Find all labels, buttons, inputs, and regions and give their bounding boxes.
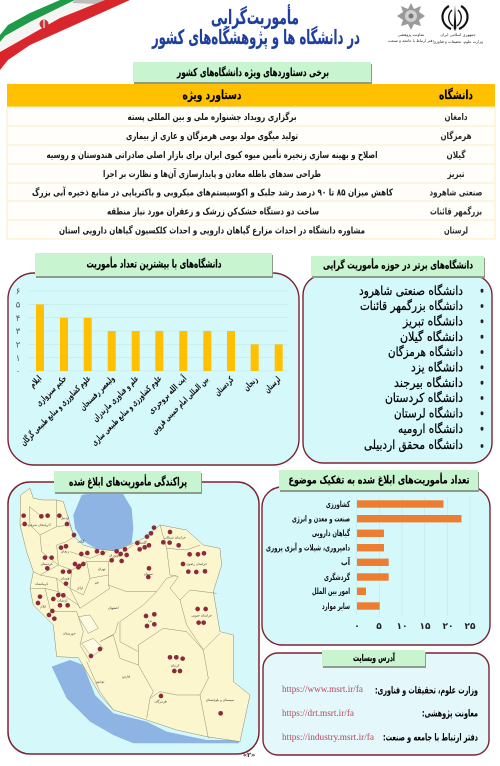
list of top universities: دانشگاه کردستان [385,390,463,406]
list of top universities: دانشگاه ارومیه [398,421,463,437]
list of top universities: دانشگاه بزرگمهر قائنات [360,298,463,314]
column chart: ایلام [28,374,44,390]
bar chart: کشاورزی [326,500,350,510]
list of top universities [359,283,482,453]
column chart: ولیعصر رفسنجان [78,374,117,413]
map of Iran: همدان [61,576,70,580]
icon: research deputy star logo: معاونت پژوهشی [398,32,424,37]
bar chart: ۰ [354,622,360,632]
bar chart: آب [341,556,351,568]
bar chart [266,497,476,632]
table rows: طراحی سدهای باطله معادن و پایدارسازی آن‌ها و نظارت بر اجرا [103,167,321,180]
map of Iran: تهران [98,567,106,571]
column chart: علم و فناوری مازندران [91,374,141,424]
list of top universities: دانشگاه گیلان [400,329,463,344]
map of Iran: یزد [148,619,152,623]
table rows: تولید میگوی مولد بومی هرمزگان و عاری از بیماری [126,130,298,142]
icon: Iran flag ribbon [0,0,130,70]
bar chart: ۵ [376,622,382,632]
list of top universities: دانشگاه یزد [411,360,463,376]
column chart: لرستان [263,375,283,396]
table rows: هرمزگان [440,130,472,142]
map of Iran: فارس [122,675,131,679]
column chart: ۵ [16,300,21,310]
column chart: علوم کشاورزی و منابع طبیعی ساری [90,374,164,448]
bar chart: ۱۰ [396,622,408,632]
map of Iran: ایلام [40,605,46,610]
heading: map: پراکندگی مأموریت‌های ابلاغ شده [69,474,187,490]
list of top universities: دانشگاه تبریز [402,314,463,330]
bar chart: سایر موارد [322,602,350,612]
address rows: https://industry.msrt.ir/fa [282,732,374,742]
map of Iran: گیلان [77,539,85,543]
list of top universities: دانشگاه لرستان [394,406,463,422]
panel: top universities list [303,256,492,463]
icon: research deputy star logo [388,3,434,43]
page number: «۲» [243,751,255,759]
map of Iran: اردبیل [61,516,69,520]
panel: universities with most missions [8,253,299,465]
column chart: علوم کشاورزی و منابع طبیعی گرگان [18,373,93,448]
map of Iran: لرستان [57,599,67,603]
bar chart: ۲۰ [442,622,454,632]
table rows: گیلان [446,149,466,161]
bar chart: ۲۵ [464,622,476,632]
map of Iran [20,488,250,743]
table rows: برگزاری رویداد جشنواره ملی و بین المللی پسته [128,111,296,123]
icon: Islamic Republic emblem: جمهوری اسلامی ایران [440,32,476,37]
list of top universities: دانشگاه صنعتی شاهرود [359,283,463,299]
list of top universities: دانشگاه محقق اردبیلی [364,437,463,453]
table rows: اصلاح و بهینه سازی زنجیره تأمین میوه کیوی ایران برای بازار اصلی صادراتی هندوستان و روسیه [46,148,378,161]
table rows: مشاوره دانشگاه در احداث مزارع گیاهان دارویی و احداث کلکسیون گیاهان دارویی استان [59,224,365,236]
list of top universities: دانشگاه بیرجند [394,375,463,391]
map of Iran: اصفهان [108,606,119,610]
panel: missions by topic [262,470,490,645]
column chart: ۰ [16,367,20,377]
column chart: بین المللی امام خمینی قزوین [150,375,211,437]
map of Iran: اراک [77,586,83,590]
map of Iran: قم [95,580,99,584]
map of Iran: سمنان [144,572,153,576]
heading: achievements: برخی دستاوردهای ویژه دانشگاه‌های کشور [176,66,329,79]
bar chart: دامپروری، شیلات و آبزی پروری [266,542,350,554]
heading: most missions: دانشگاه‌های با بیشترین تعداد مأموریت [86,256,222,270]
map of Iran: سیستان و بلوچستان [206,698,234,702]
list of top universities: دانشگاه هرمزگان [388,344,463,360]
map of Iran: زنجان [61,549,69,553]
panel: website addresses [263,650,489,755]
address rows: https://drt.msrt.ir/fa [282,708,354,718]
table rows: صنعتی شاهرود [430,188,482,198]
table rows: دامغان [444,112,468,123]
heading: website addresses: آدرس وبسایت [353,652,396,664]
column chart [16,287,288,448]
panel: achievements table [7,62,495,239]
table rows: ساخت دو دستگاه خشک‌کن زرشک و زعفران مورد نیاز منطقه [107,206,319,218]
heading: achievements [133,62,372,84]
map of Iran: گلستان [137,540,147,544]
column chart: ۲ [16,340,21,350]
bar chart: ۱۵ [420,622,431,632]
map of Iran: آذربایجان شرقی [28,523,52,527]
table rows: تبریز [447,169,464,180]
column chart: حکیم سبزواری [34,374,69,409]
map of Iran: هرمزگان [155,699,167,703]
bar chart: گردشگری [324,572,350,583]
heading: map [54,471,202,494]
map of Iran: مازندران [109,554,121,558]
table header row [7,84,495,107]
column chart: ۳ [16,327,21,337]
column chart: زنجان [242,375,260,393]
address rows [282,684,478,744]
map mission dots [21,513,223,716]
icon: Islamic Republic emblem: وزارت علوم، تحقیقات و فناوری [433,39,483,44]
column chart: ۴ [16,314,20,324]
address rows: https://www.msrt.ir/fa [282,684,363,694]
map of Iran: خوزستان [63,631,76,635]
map of Iran: کرمان [171,664,180,668]
heading: most missions [35,253,273,278]
map of Iran: کردستان [41,562,53,566]
bar chart: گیاهان دارویی [312,528,350,539]
table rows: کاهش میزان ۸۵ تا ۹۰ درصد رشد جلبک و اکوسیستم‌های میکروبی و باکتریایی در منابع ذخیره آبی بزرگ [32,186,393,198]
map of Iran: خراسان رضوی [186,562,207,566]
table header row: دستاورد ویژه [182,87,242,102]
table rows: لرستان [444,226,468,236]
table header row: دانشگاه [439,87,473,102]
column chart: کردستان [213,375,236,398]
column chart: ۱ [16,354,20,364]
icon: research deputy star logo: دفتر ارتباط با جامعه و صنعت [388,38,434,43]
map of Iran: خراسان شمالی [164,535,186,539]
map of Iran: خراسان جنوبی [191,614,212,618]
table rows [7,107,495,239]
column chart: ۶ [16,287,20,297]
map of Iran: بوشهر [95,679,104,683]
icon: Islamic Republic emblem [433,5,483,44]
heading: top universities [311,256,485,278]
column chart: آیت الله بروجردی [145,372,190,416]
heading: website addresses [322,650,426,668]
bar chart: صنعت و معدن و انرژی [292,514,350,524]
title [151,3,360,50]
heading: missions by topic [279,470,479,492]
title: مأموریت‌گرایی [211,3,299,29]
panel: map of missions [8,471,259,754]
bar chart: امور بین الملل [312,587,350,597]
map of Iran: کرمانشاه [35,582,49,586]
